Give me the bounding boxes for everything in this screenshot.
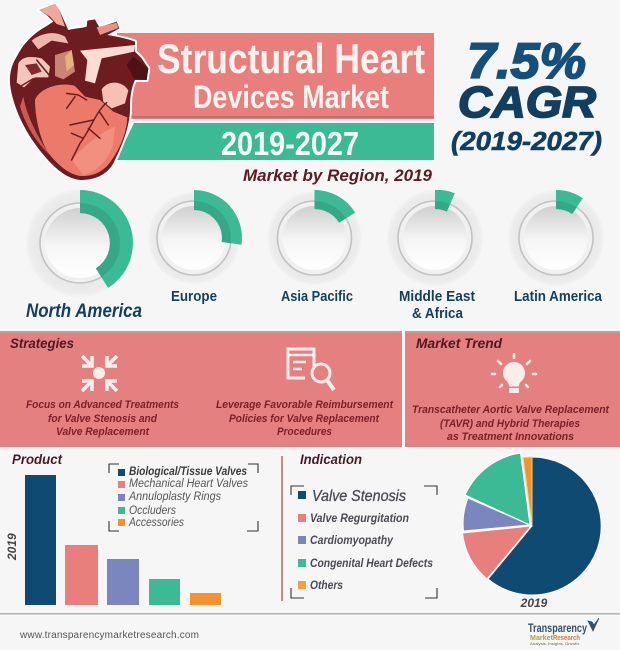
legend: indication: Valve Regurgitation (310, 513, 409, 525)
icon: anatomical heart (10, 4, 148, 180)
title: Structural Heart Devices Market (157, 35, 425, 115)
heading: Indication: Indication (300, 451, 362, 467)
region labels: North America (26, 301, 142, 322)
logo: Transparency Market Research: Research (553, 633, 580, 642)
heading: Market by Region: Market by Region, 2019 (243, 166, 433, 185)
title: Structural Heart Devices Market: Devices Market (193, 79, 389, 115)
text: trend: Transcatheter Aortic Valve Replacement (412, 404, 610, 416)
logo: Transparency Market Research: Analysis. Insights. Growth. (530, 642, 580, 646)
icon: arrows converging (82, 356, 117, 391)
legend: product (109, 464, 258, 531)
title banner (116, 33, 434, 162)
donut: North America (26, 189, 134, 297)
donut: Asia Pacific (268, 190, 362, 285)
region labels: Asia Pacific (281, 289, 353, 305)
bar chart: product (5, 475, 221, 605)
logo: Transparency Market Research (528, 618, 599, 646)
text: strategy one: Focus on Advanced Treatments (26, 399, 179, 411)
CAGR callout: (2019-2027) (451, 126, 602, 156)
legend: indication: Valve Stenosis (312, 488, 406, 505)
legend: indication: Cardiomyopathy (310, 535, 394, 547)
CAGR callout: 7.5% (467, 33, 586, 89)
region labels: Middle East (399, 289, 475, 305)
region labels (26, 289, 603, 322)
icon: document with magnifier (288, 349, 334, 390)
pie chart: indication (462, 453, 601, 610)
pie year label: 2019 (520, 596, 548, 610)
title: Structural Heart Devices Market: Structural Heart (157, 35, 425, 82)
legend: product: Biological/Tissue Valves (129, 466, 247, 478)
title years: 2019-2027 (221, 125, 359, 162)
heading: Product: Product (12, 451, 63, 467)
legend: indication (291, 486, 437, 598)
donut: Middle East & Africa (387, 190, 483, 286)
legend: indication: Congenital Heart Defects (310, 558, 433, 570)
website url: www.transparencymarketresearch.com (19, 630, 199, 641)
logo: Transparency Market Research: Market (530, 633, 553, 642)
text: strategy one: for Valve Stenosis and (48, 413, 157, 425)
text: strategy two: Procedures (277, 426, 332, 438)
CAGR callout (451, 33, 602, 156)
icon: light bulb (492, 354, 536, 393)
donut: Latin America (508, 190, 604, 286)
heading: Market Trend: Market Trend (416, 335, 502, 351)
legend: product: Annuloplasty Rings (128, 491, 221, 503)
legend: indication: Others (310, 580, 343, 592)
text: trend (412, 404, 610, 443)
donut: Europe (148, 190, 242, 284)
axis label: 2019 (5, 533, 19, 561)
region labels: Europe (171, 289, 217, 305)
region labels: Latin America (514, 289, 603, 305)
region labels: & Africa (412, 306, 464, 322)
text: trend: as Treatment Innovations (447, 431, 574, 443)
text: strategy one: Valve Replacement (56, 426, 150, 438)
heading: Strategies: Strategies (10, 335, 74, 351)
text: strategy two (216, 399, 394, 438)
text: strategy two: Leverage Favorable Reimbursement (216, 399, 394, 411)
logo: Transparency Market Research: Transparency (528, 621, 587, 635)
text: strategy one (26, 399, 179, 438)
panel: strategies (0, 331, 402, 447)
panel: market trend (405, 331, 620, 447)
legend: product: Mechanical Heart Valves (129, 478, 248, 490)
text: trend: (TAVR) and Hybrid Therapies (440, 418, 580, 430)
text: strategy two: Policies for Valve Replacement (229, 413, 380, 425)
CAGR callout: CAGR (458, 78, 596, 127)
legend: product: Accessories (128, 517, 184, 529)
legend: product: Occluders (129, 505, 176, 517)
